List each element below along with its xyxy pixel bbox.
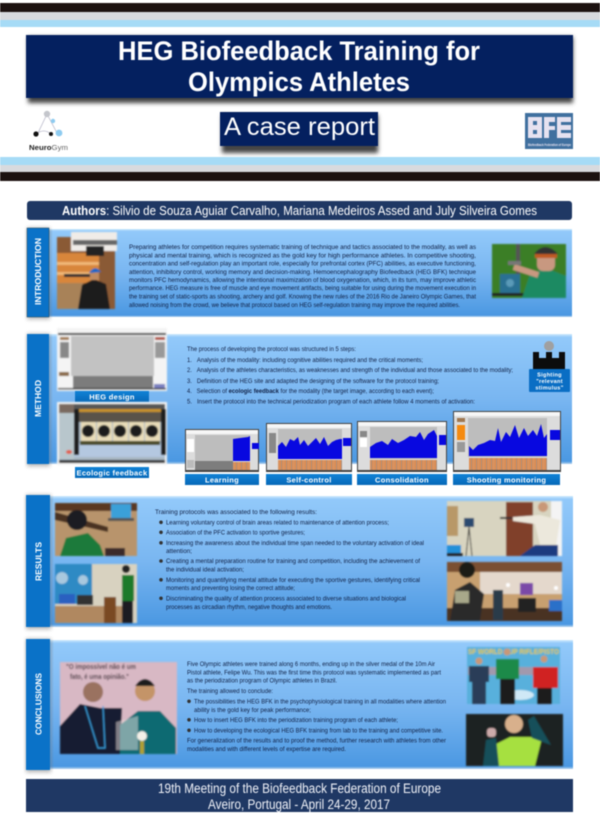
text: introduction body: performance. HEG measure is free of muscle and eye movement artifacts, being suitable for using during the movement execution in <box>129 285 476 292</box>
label: shooting monitoring: Shooting monitoring <box>467 476 546 484</box>
lower header bands <box>0 157 600 181</box>
text: introduction body: the training set of static-sports as shooting, archery and golf. Knowing the new rules of the 2016 Rio de Janeiro Olympic Games, that <box>129 294 476 300</box>
subtitle <box>220 112 378 153</box>
icon: sighting target: stimulus" <box>535 386 564 392</box>
title <box>26 35 573 103</box>
label: learning: Learning <box>205 476 239 484</box>
footer bar <box>26 779 573 812</box>
text: introduction body <box>129 244 477 309</box>
text: introduction body: attention, inhibitory control, working memory and decision-making. Hemoencephalography Biofeedback (HEG BFK) technique <box>129 269 476 276</box>
label: ecologic feedback: Ecologic feedback <box>77 468 148 478</box>
text: results list: Discriminating the quality of attention process associated to diverse situations and biological <box>166 596 406 602</box>
section tab: conclusions <box>26 639 51 772</box>
text: method steps: 2. Analysis of the athletes characteristics, as weaknesses and strength of the individual and those associated to the modality; <box>187 367 513 374</box>
text: introduction body: concentration and self-regulation play an important role, especially for prefrontal cortex (PFC) abilities, as executive functioning, <box>129 260 476 268</box>
section tab: method: METHOD <box>34 380 43 417</box>
panel: method <box>27 328 572 485</box>
icon: NeuroGym logo: NeuroGym <box>29 143 68 152</box>
chart screenshot: learning <box>185 429 259 472</box>
top header bands <box>0 3 600 27</box>
title: Olympics Athletes <box>188 67 410 97</box>
label: shooting monitoring <box>453 474 560 485</box>
text: results list: Association of the PFC activation to sportive gestures; <box>166 530 305 536</box>
text: conclusions body: as the periodization program of Olympic athletes in Brazil. <box>187 678 337 684</box>
label: HEG design <box>75 391 149 402</box>
subtitle: A case report <box>224 113 375 141</box>
panel: introduction <box>27 228 572 319</box>
label: consolidation <box>357 474 447 485</box>
authors bar <box>27 201 572 220</box>
label: learning <box>185 474 259 485</box>
text: conclusions body <box>187 661 447 753</box>
photo: shooter in blue cap <box>57 232 117 309</box>
photo: coach and athlete with medal <box>60 662 177 754</box>
text: conclusions body: Pistol athlete, Felipe Wu. This was the first time this protocol was systematic implemented as part <box>187 670 441 676</box>
text: method steps <box>187 346 513 406</box>
photo: athlete on range <box>55 564 137 623</box>
section tab: introduction: INTRODUCTION <box>34 238 43 305</box>
icon: BFE logo <box>525 113 573 149</box>
text: results list: Increasing the awareness about the individual time span needed to the voluntary activation of ideal <box>166 540 425 547</box>
footer bar: Aveiro, Portugal - April 24-29, 2017 <box>208 797 390 812</box>
text: results list: Creating a mental preparation routine for training and competition, including the achievement of <box>166 558 420 565</box>
text: introduction body: allowed noising from the crowd, we believe that protocol based on HEG self-regulation training may improve the required abilities. <box>129 302 460 309</box>
text: conclusions body: The possibilities the HEG BFK in the psychophysiological training in all modalities where attention <box>194 698 446 706</box>
photo: World Cup podium <box>467 647 560 704</box>
chart screenshot: self-control <box>266 423 352 472</box>
text: introduction body: physical and mental training, which is recognized as the gold key for high performance athletes. In competitive shooting, <box>129 252 476 260</box>
authors bar: Authors: Silvio de Souza Aguiar Carvalho, Mariana Medeiros Assed and July Silveira Gomes <box>62 204 537 218</box>
photo: Olympic shooter aiming <box>492 244 566 298</box>
section tab: method <box>27 334 50 466</box>
photo: athlete celebrating with medal <box>466 714 563 766</box>
icon: BFE logo: Biofeedback Federation of Europe <box>528 143 571 147</box>
label: self-control <box>266 474 352 485</box>
section tab: results: RESULTS <box>34 541 44 581</box>
label: HEG design: HEG design <box>89 392 135 402</box>
text: results list: moments and preventing losing the correct attitude; <box>166 585 295 592</box>
text: conclusions body: How to insert HEG BFK into the periodization training program of each athlete; <box>194 717 398 724</box>
text: results list: processes as circadian rhythm, negative thoughts and emotions. <box>166 604 332 611</box>
text: method steps: 3. Definition of the HEG site and adapted the designing of the software for the protocol training; <box>187 378 439 385</box>
text: results list: Learning voluntary control of brain areas related to maintenance of attention process; <box>166 520 389 526</box>
photo: rifle shooter in range <box>447 562 562 621</box>
text: introduction body: Preparing athletes for competition requires systematic training of technique and tactics associated to the modality, as well as <box>129 244 477 251</box>
text: results list: Monitoring and quantifying mental attitude for executing the sportive gestures, identifying critical <box>166 577 421 584</box>
panel: conclusions <box>26 639 573 772</box>
text: results list <box>155 509 425 611</box>
icon: NeuroGym logo <box>29 111 68 152</box>
photo: coach and athlete with medal: "O impossível não é um <box>66 664 136 671</box>
text: conclusions body: How to developing the ecological HEG BFK training from lab to the training and competitive site. <box>194 728 443 734</box>
text: conclusions body: modalities and with different levels of expertise are required. <box>187 746 346 753</box>
icon: sighting target: Sighting <box>537 372 562 378</box>
icon: sighting target <box>529 341 570 392</box>
text: method steps: 5. Insert the protocol into the technical periodization program of each athlete follow 4 moments of activation: <box>187 398 475 406</box>
icon: sighting target: "relevant <box>536 379 563 385</box>
text: conclusions body: Five Olympic athletes were trained along 6 months, ending up in the silver medal of the 10m Air <box>187 661 436 668</box>
section tab: results <box>26 495 51 629</box>
photo: athlete at laptop <box>55 503 137 556</box>
section tab: conclusions: CONCLUSIONS <box>34 672 44 735</box>
title: HEG Biofeedback Training for <box>118 36 480 66</box>
footer bar: 19th Meeting of the Biofeedback Federation of Europe <box>158 781 441 796</box>
chart screenshot: shooting monitoring <box>453 411 561 472</box>
text: conclusions body: ability is the gold key for peak performance; <box>194 707 311 714</box>
text: method steps: 4. Selection of ecologic feedback for the modality (the target image, according to each event); <box>187 388 434 395</box>
screenshot: ecologic feedback <box>57 402 167 465</box>
screenshot: HEG design <box>57 328 167 391</box>
section tab: introduction <box>27 228 50 319</box>
text: conclusions body: For generalization of the results and to proof the method, further research with athletes from other <box>187 738 447 744</box>
text: method steps: The process of developing the protocol was structured in 5 steps: <box>187 346 356 353</box>
label: consolidation: Consolidation <box>375 476 429 484</box>
text: introduction body: monitors PFC hemodynamics, allowing the intentional maximization of blood oxygenation, which, in its turn, may improve athletic <box>129 277 477 284</box>
text: results list: attention; <box>166 548 192 555</box>
text: method steps: 1. Analysis of the modality: including cognitive abilities required and the critical moments; <box>187 357 423 364</box>
photo: pistol shooter with monitor <box>447 501 562 556</box>
text: results list: Training protocols was associated to the following results: <box>155 509 317 516</box>
chart screenshot: consolidation <box>357 421 447 472</box>
photo: World Cup podium: SF WORLD CUP RIFLE/PISTO <box>468 649 560 656</box>
photo: coach and athlete with medal: fato, é uma opinião." <box>70 674 129 681</box>
panel: results <box>26 495 573 629</box>
label: self-control: Self-control <box>286 476 332 484</box>
text: conclusions body: The training allowed to conclude: <box>187 688 273 695</box>
text: results list: the individual ideal activation; <box>166 566 244 574</box>
